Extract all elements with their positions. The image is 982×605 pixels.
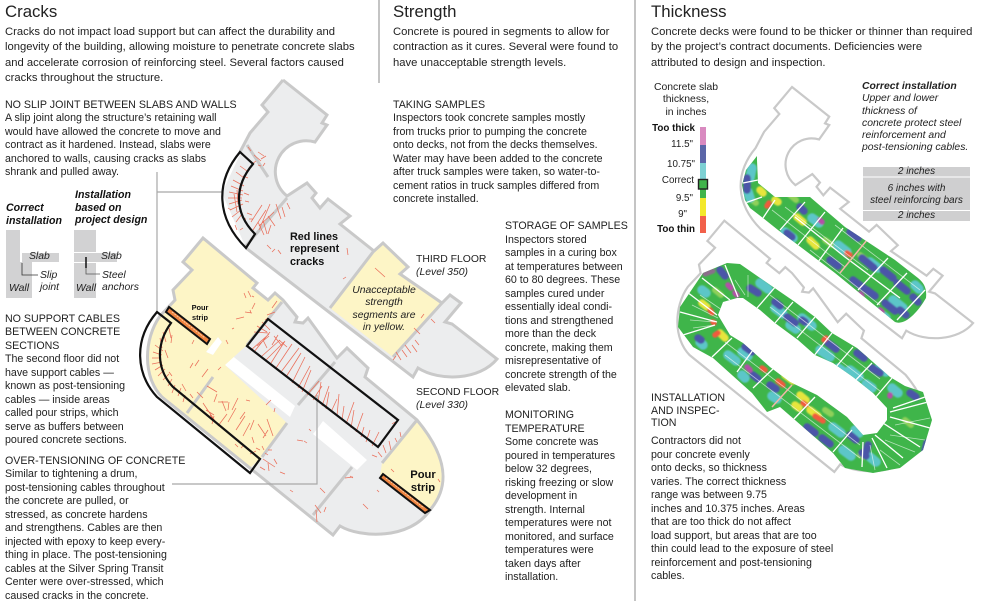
text: installation paragraph: cables. [651,570,685,582]
thin slab lines [690,207,930,470]
text: monitoring temperature: development in [505,490,577,502]
label: unacceptable strength: segments are [353,310,415,321]
text: installation paragraph: varies. The correct thickness [651,476,786,488]
text: storage of samples [505,220,628,394]
yellow strength segment, third floor [330,243,442,357]
text: storage of samples: 60 to 80 degrees. These [505,274,620,286]
label: unacceptable strength: strength [365,297,403,308]
text: monitoring temperature: below 32 degrees, [505,463,592,475]
cracks, third floor [228,147,435,360]
text: installation paragraph: onto decks, so thickness [651,462,767,474]
label: second floor [416,387,499,410]
text: installation paragraph: load support, but areas that are too [651,530,817,542]
black highlight outlines [140,152,398,473]
label: correct installation, thickness: concrete protect steel [862,118,961,129]
thickness blotches: purple [728,220,890,396]
label: third floor: (Level 350) [416,266,468,278]
text: over-tensioning: stressed, as concrete hardens [5,509,148,521]
text: over-tensioning: thing in place. The post-tensioning [5,549,167,561]
text: no support cables: SECTIONS [5,340,59,352]
text: installation and inspection: AND INSPEC- [651,405,720,417]
text: no slip joint [5,98,237,178]
thickness blotches: mauve [705,271,713,274]
text: taking samples [393,98,603,205]
text: no slip joint: contract as it hardened. Instead, slabs were [5,139,211,151]
text: installation paragraph: range was between 9.75 [651,489,767,501]
cracks, second floor [152,291,440,522]
legend labels [652,123,695,235]
label: large pour strip: strip [411,482,435,494]
strength intro: Concrete is poured in segments to allow for [393,26,609,38]
text: monitoring temperature: TEMPERATURE [505,423,585,435]
text: no slip joint: shrank and pulled away. [5,166,119,178]
text: no support cables: known as post-tensioning [5,380,125,392]
text: monitoring temperature: temperatures were not [505,517,611,529]
slab section labels: 6 inches with [888,183,945,194]
text: installation paragraph: inches and 10.375 inches. Areas [651,503,805,515]
label: small pour strip: strip [192,313,208,322]
text: no support cables: cables — inside areas [5,394,110,406]
pour strip, right [380,474,430,513]
label: unacceptable strength: in yellow. [363,322,405,333]
slab section labels: 2 inches [898,166,935,177]
text: over-tensioning [5,454,185,602]
major slab joints [680,180,930,468]
label: correct installation, thickness: Upper and lower [862,93,938,104]
text: storage of samples: concrete strength of the [505,369,617,381]
text: over-tensioning: Similar to tightening a drum, [5,468,137,480]
correct installation slab section [863,167,970,221]
thickness intro: attributed to design and inspection. [651,57,826,69]
text: storage of samples: STORAGE OF SAMPLES [505,220,628,232]
diagram: project design anchors [74,230,117,298]
label: correct installation, thickness: reinforcement and [862,130,946,141]
label: unacceptable strength [352,285,416,333]
text: taking samples: after truck samples were taken, so water-to- [393,166,600,178]
labels: anchors diagram: anchors [102,282,139,293]
text: storage of samples: samples in a curing box [505,247,617,259]
pour strip, left [166,307,210,344]
slab section labels: steel reinforcing bars [870,195,963,206]
legend labels: Too thin [657,224,695,235]
label: installation based on design: based on [75,202,122,214]
text: taking samples: TAKING SAMPLES [393,98,485,110]
cracks intro [5,26,355,84]
thickness intro: by the project’s contract documents. Deficiencies were [651,41,922,53]
text: over-tensioning: Center were over-stressed, which [5,576,164,588]
text: over-tensioning: OVER-TENSIONING OF CONCRETE [5,454,185,466]
legend labels: 10.75" [667,159,695,170]
labels: correct joint diagram: Wall [9,283,29,294]
pink slab joints [772,240,867,407]
thickness blotches: light green [715,195,911,457]
cracks intro: and accelerate corrosion of reinforcing steel. Several factors caused [5,57,344,69]
label: installation based on design: project design [75,214,147,226]
text: no slip joint: would have allowed the concrete to move and [5,126,221,138]
text: monitoring temperature: poured in temperatures [505,450,615,462]
text: installation paragraph: pour concrete evenly [651,449,750,461]
label: large pour strip: Pour [410,469,436,481]
labels: anchors diagram [76,251,139,294]
label: correct installation, thickness: post-tensioning cables. [862,142,968,153]
floor plan: second floor with cracks [147,238,443,535]
labels: correct joint diagram: Slip [40,270,57,281]
text: no support cables: poured concrete sections. [5,434,127,446]
text: installation and inspection: TION [651,417,676,429]
thickness intro [651,26,972,69]
label: red lines represent cracks [290,231,340,268]
floor plan: third floor with cracks [222,80,497,377]
text: no support cables: The second floor did not [5,353,119,365]
labels: correct joint diagram: Slab [29,251,50,262]
connector lines [157,172,317,484]
label: installation based on design [74,189,147,226]
label: second floor: (Level 330) [416,400,468,410]
labels: anchors diagram: Steel [102,270,126,281]
label: red lines represent cracks: Red lines [290,231,338,243]
legend labels: Too thick [652,123,695,134]
text: monitoring temperature: MONITORING [505,409,574,421]
text: no support cables: NO SUPPORT CABLES [5,312,120,324]
strength intro [393,26,618,69]
label: correct installation, thickness [862,81,968,153]
text: storage of samples: essentially ideal condi- [505,301,612,313]
labels: correct joint diagram [9,251,60,294]
title: thickness: Thickness [651,2,727,21]
text: no support cables: called pour strips, which [5,407,119,419]
legend title: thickness, [663,94,709,105]
thickness blotches: yellow [702,190,818,416]
text: taking samples: from trucks prior to pumping the concrete [393,126,587,138]
thickness intro: Concrete decks were found to be thicker or thinner than required [651,26,972,38]
text: taking samples: onto decks, not from the decks themselves. [393,139,598,151]
labels: correct joint diagram: joint [40,282,59,293]
thickness blotches: red [710,203,850,421]
strength intro: contraction as it cures. Several were found to [393,41,618,53]
label: third floor: THIRD FLOOR [416,254,486,265]
text: no slip joint: A slip joint along the structure’s retaining wall [5,112,217,124]
cracks intro: longevity of the building, allowing moisture to penetrate concrete slabs [5,41,355,53]
legend title: Concrete slab [654,82,718,93]
legend title: in inches [665,107,706,118]
text: taking samples: Water may have been added to the concrete [393,153,603,165]
text: storage of samples: samples cured under [505,288,604,300]
thickness blotches: blue [698,178,927,456]
text: no support cables: have support cables — [5,367,114,379]
column divider: strength and thickness [634,0,636,601]
labels: anchors diagram: Slab [101,251,122,262]
text: over-tensioning: injected with epoxy to keep every- [5,536,165,548]
text: storage of samples: at temperatures between [505,261,623,273]
label: small pour strip [192,303,208,322]
cracks intro: cracks throughout the structure. [5,72,163,84]
thickness blotches: cyan [700,168,919,462]
text: storage of samples: concrete, making them [505,342,613,354]
text: installation paragraph: that are too thick do not affect [651,516,791,528]
text: installation and inspection [651,392,725,429]
cracks intro: Cracks do not impact load support but can affect the durability and [5,26,335,38]
label: unacceptable strength: Unacceptable [352,285,416,296]
label: correct installation [6,202,62,226]
text: storage of samples: Inspectors stored [505,234,587,246]
strength intro: have unacceptable strength levels. [393,57,566,69]
text: installation paragraph: Contractors did not [651,435,741,447]
text: monitoring temperature: strength. Internal [505,504,585,516]
labels: anchors diagram: Wall [76,283,96,294]
text: monitoring temperature: installation. [505,571,558,583]
legend labels: Correct [662,175,694,186]
label: second floor: SECOND FLOOR [416,387,499,398]
text: no slip joint: NO SLIP JOINT BETWEEN SLABS AND WALLS [5,98,237,110]
legend title [654,82,718,118]
diagram: correct slip joint [6,230,59,298]
text: over-tensioning: post-tensioning cables throughout [5,482,165,494]
text: storage of samples: tions and strengthened [505,315,613,327]
text: no slip joint: anchored to walls, causing cracks as slabs [5,153,206,165]
text: monitoring temperature [505,409,615,583]
text: over-tensioning: the concrete are pulled, or [5,495,129,507]
heat map: concrete thickness [670,150,940,480]
thickness plan outline [677,87,973,472]
text: no support cables: serve as buffers between [5,421,124,433]
text: storage of samples: more than the deck [505,328,596,340]
text: taking samples: Inspectors took concrete samples mostly [393,112,585,124]
title: strength: Strength [393,2,456,21]
label: correct installation: Correct [6,202,44,214]
text: monitoring temperature: Some concrete was [505,436,598,448]
legend colour bar [698,127,708,233]
text: monitoring temperature: risking freezing or slow [505,477,613,489]
text: over-tensioning: and strengthens. Cables are then [5,522,162,534]
label: correct installation: installation [6,214,62,226]
label: small pour strip: Pour [192,303,208,312]
text: no support cables: BETWEEN CONCRETE [5,326,120,338]
label: red lines represent cracks: represent [290,243,339,255]
text: over-tensioning: caused cracks in the concrete. [5,590,149,602]
text: installation paragraph: thin could lead to the exposure of steel [651,543,833,555]
slab section labels [870,166,963,221]
label: red lines represent cracks: cracks [290,256,324,268]
label: large pour strip [410,469,436,494]
text: storage of samples: misrepresentative of [505,355,601,367]
title: cracks: Cracks [5,2,57,21]
yellow strength segments, second floor [147,238,287,468]
label: correct installation, thickness: Correct installation [862,81,957,92]
legend labels: 11.5" [671,139,693,150]
text: installation paragraph [651,435,833,582]
text: monitoring temperature: monitored, and surface [505,531,614,543]
label: installation based on design: Installation [75,189,131,201]
text: taking samples: cement ratios in truck samples differed from [393,180,599,192]
label: correct installation, thickness: thickness of [862,106,917,117]
text: no support cables [5,312,127,446]
legend labels: 9" [678,209,687,220]
text: over-tensioning: cables at the Silver Spring Transit [5,563,164,575]
column divider: cracks and strength [378,0,380,83]
text: monitoring temperature: taken days after [505,558,581,570]
text: monitoring temperature: temperatures were [505,544,594,556]
text: installation paragraph: reinforcement and post-tensioning [651,557,812,569]
legend labels: 9.5" [676,193,693,204]
text: storage of samples: elevated slab. [505,382,571,394]
text: installation and inspection: INSTALLATION [651,392,725,404]
label: third floor [416,254,486,278]
text: taking samples: concrete installed. [393,193,479,205]
slab section labels: 2 inches [898,210,935,221]
